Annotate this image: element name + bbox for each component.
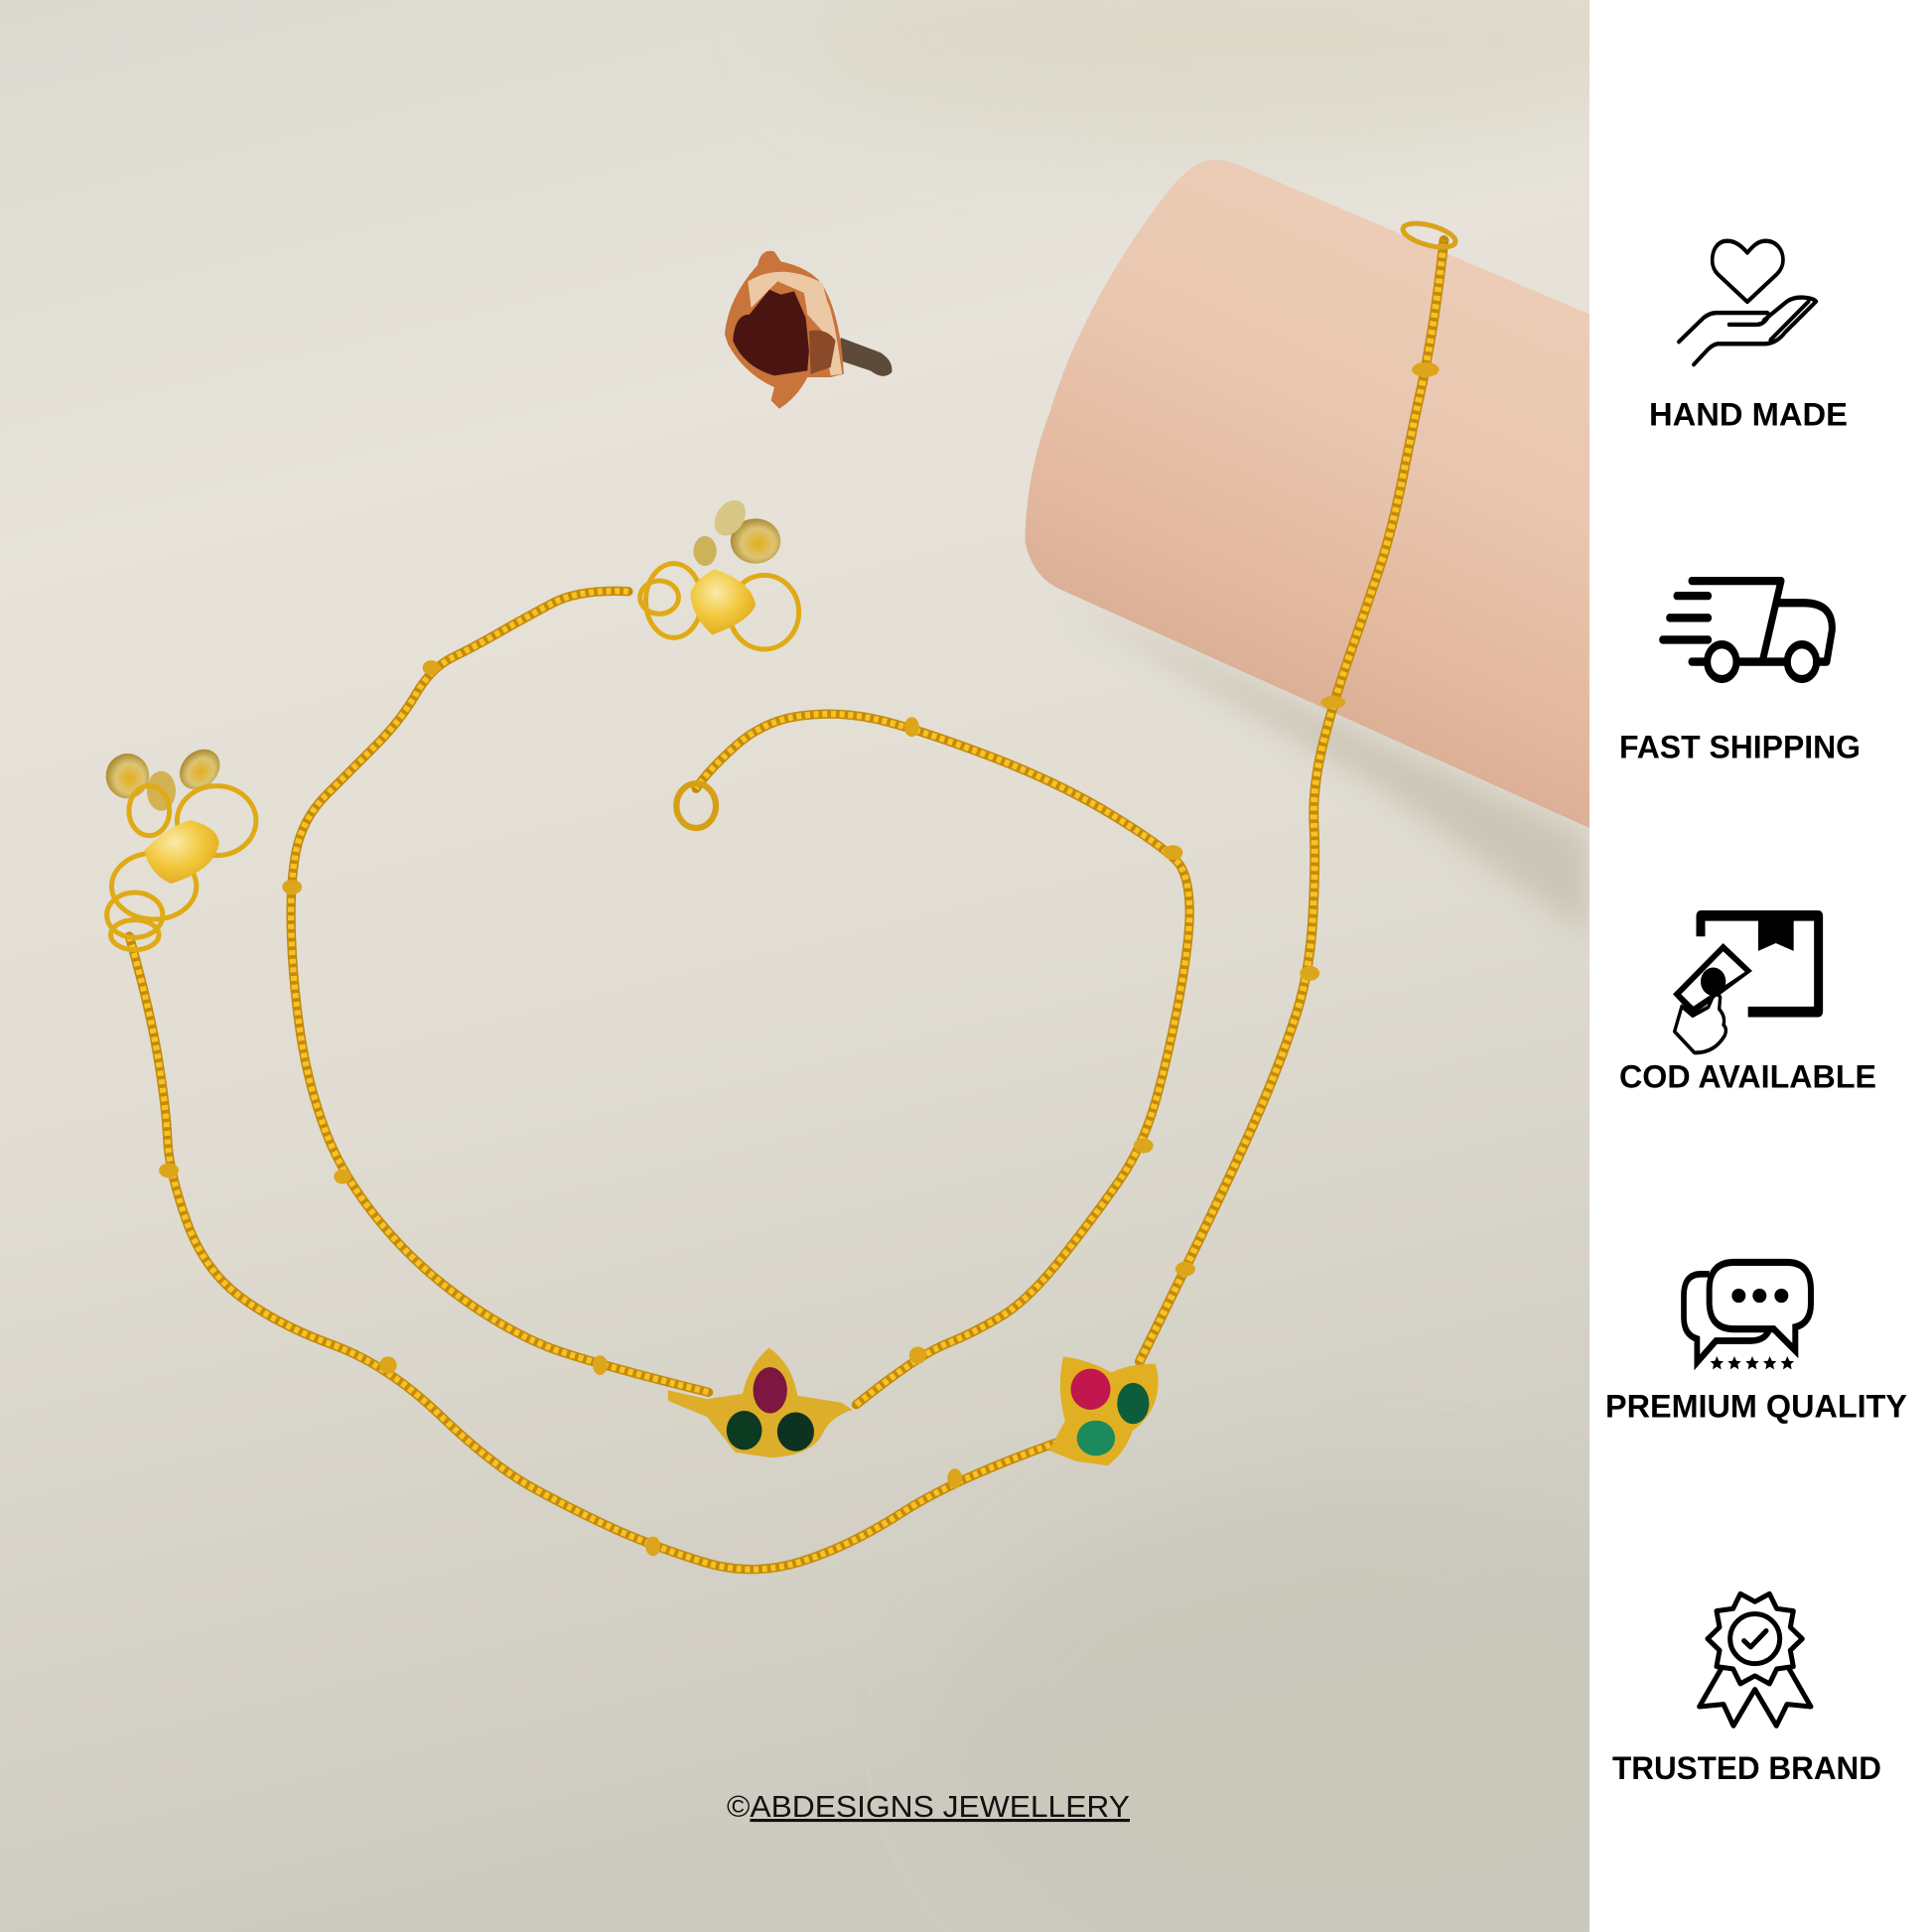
lotus pendant with ruby and emeralds (668, 1347, 853, 1457)
label: trusted brand: TRUSTED BRAND (1612, 1750, 1881, 1786)
label: premium quality: PREMIUM QUALITY (1605, 1389, 1907, 1425)
chain: outer anklet (129, 218, 1458, 1570)
icon: heart in hand (1679, 241, 1816, 364)
watermark: ©ABDESIGNS JEWELLERY (727, 1789, 1130, 1824)
icon: award rosette (1700, 1593, 1811, 1725)
clasp: outer anklet (106, 747, 256, 950)
cylinder shadow (1132, 633, 1589, 929)
butterfly pendant with ruby and emeralds (1049, 1356, 1159, 1465)
dried rosebud (725, 251, 892, 409)
panel: features (1589, 0, 1932, 1932)
icon: cash on delivery (1673, 915, 1819, 1052)
clasp: inner anklet (640, 497, 799, 649)
label: hand made: HAND MADE (1649, 397, 1848, 433)
label: cod available: COD AVAILABLE (1619, 1058, 1876, 1094)
label: fast shipping: FAST SHIPPING (1619, 729, 1861, 764)
icon: chat bubbles with stars (1684, 1262, 1811, 1369)
chain: inner anklet (282, 591, 1189, 1405)
icon: fast shipping truck (1663, 581, 1832, 679)
peach cylinder (1026, 160, 1589, 828)
